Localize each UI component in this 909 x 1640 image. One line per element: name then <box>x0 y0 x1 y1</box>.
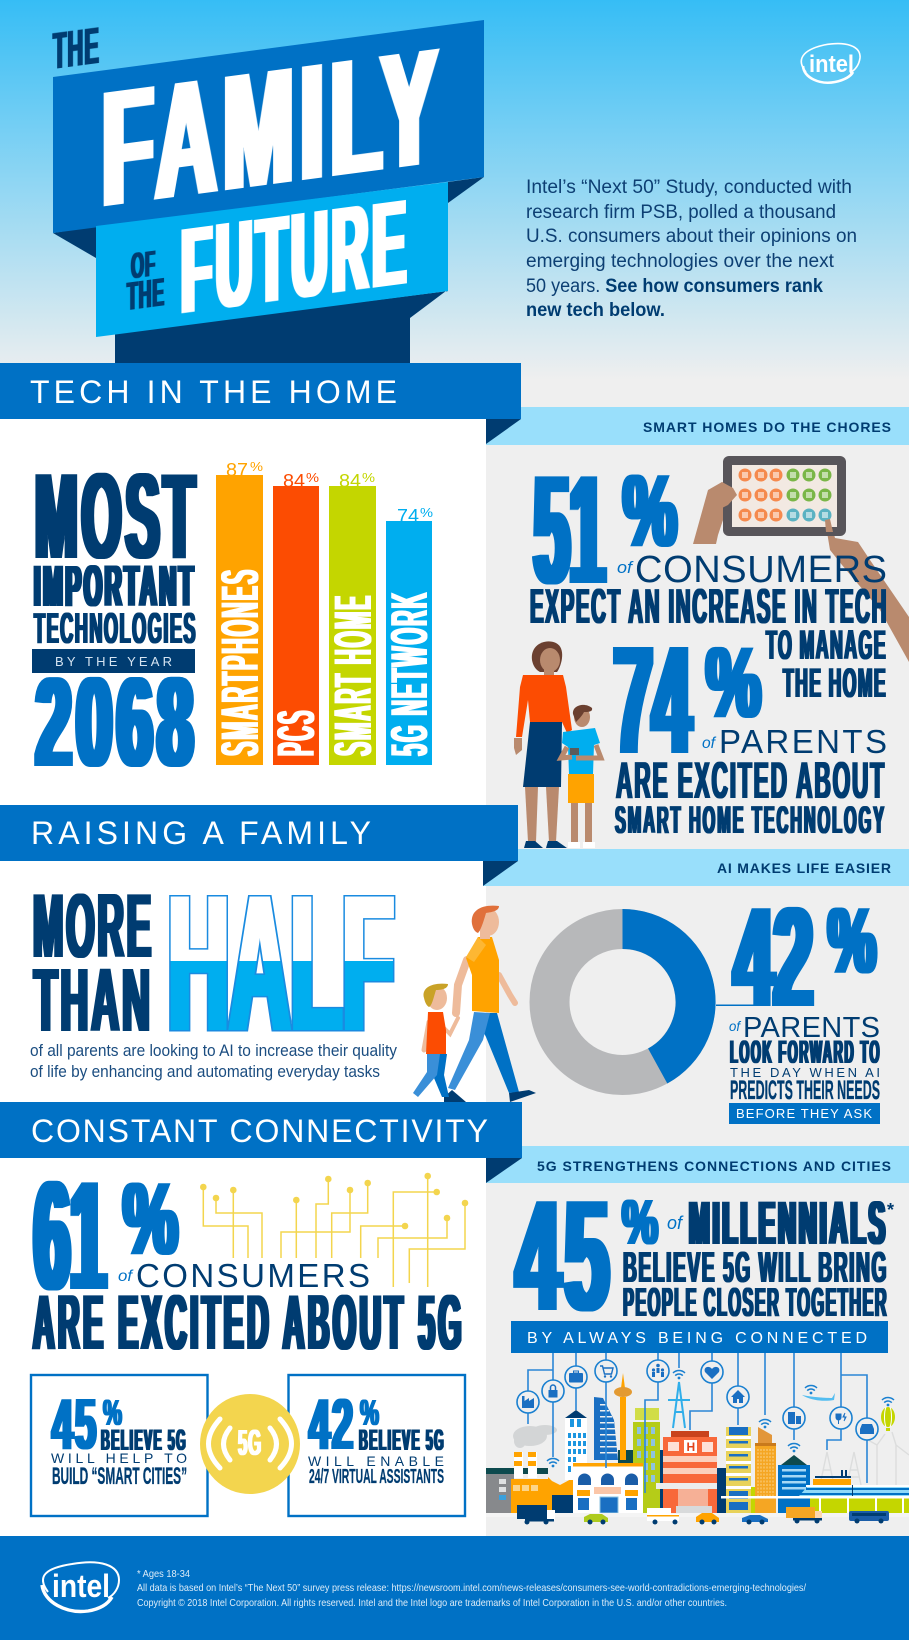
title text <box>53 0 444 356</box>
background panels <box>0 380 909 1540</box>
footer text: All data is based on Intel’s “The Next 50” survey press release: https://newsroom.intel.com/news-releases/consumers-see-world-contradictions-emerging-technologies/ <box>137 1582 806 1594</box>
stat: 42% of parents: THE DAY WHEN AI <box>730 1065 880 1080</box>
light band: ai makes life easier <box>483 849 909 886</box>
connected city illustration <box>486 1353 909 1524</box>
stat: 51% of consumers: of <box>617 558 634 577</box>
icon: people <box>647 1360 669 1382</box>
bar chart: 84 <box>339 471 361 491</box>
text: BELIEVE 5G <box>359 1424 445 1457</box>
bar: by always being connected: BY ALWAYS BEING CONNECTED <box>527 1330 867 1347</box>
stat: 51% of consumers <box>530 443 888 706</box>
bar chart: 87 <box>226 460 248 480</box>
stat: 42% of parents <box>729 878 881 1124</box>
section header: tech in the home: TECH IN THE HOME <box>30 374 397 410</box>
icon: shopping cart <box>595 1360 617 1382</box>
heading: more than half: THAN <box>34 951 153 1051</box>
intro paragraph: Intel’s “Next 50” Study, conducted with <box>526 177 852 198</box>
title text: THE <box>127 269 165 319</box>
section header: tech in the home <box>0 363 521 444</box>
stat: 42% of parents: of <box>729 1018 742 1034</box>
icon: car <box>856 1418 878 1440</box>
intro paragraph: research firm PSB, polled a thousand <box>526 202 836 223</box>
section header: constant connectivity: CONSTANT CONNECTIVITY <box>31 1113 488 1149</box>
bar chart: % <box>362 470 375 485</box>
box: 45% smart cities: BELIEVE 5G <box>101 1424 187 1457</box>
text: MOST <box>35 448 199 584</box>
bar chart: SMART HOME <box>324 594 383 756</box>
title sign: FUTURE <box>181 172 410 339</box>
bar chart: SMARTPHONES <box>211 568 270 756</box>
right buildings <box>721 1427 909 1514</box>
title text: OF <box>131 243 156 287</box>
section header: constant connectivity <box>0 1102 522 1183</box>
stat: 74% of parents <box>614 614 887 842</box>
heading: most important technologies <box>32 448 199 793</box>
stat: 45% of millennials: 45 <box>516 1168 613 1344</box>
intro paragraph: emerging technologies over the next <box>526 251 835 272</box>
light band: smart homes: SMART HOMES DO THE CHORES <box>643 419 891 435</box>
text: parents looking to ai <box>30 1041 397 1081</box>
section header: raising a family <box>0 805 518 886</box>
stat: 42% of parents: 42 <box>734 878 813 1037</box>
box: 42% virtual assistants <box>288 1375 465 1516</box>
icon: 5g signal badge: 5G <box>238 1422 262 1463</box>
stat: 51% of consumers: 51 <box>534 443 605 616</box>
icon: briefcase <box>565 1366 587 1388</box>
icon: lock <box>542 1380 564 1402</box>
stat: 61% of consumers: of <box>118 1268 134 1285</box>
section header: raising a family: RAISING A FAMILY <box>31 815 371 851</box>
intro paragraph: 50 years. See how consumers rank <box>526 276 823 297</box>
background sky <box>0 0 909 380</box>
light band: 5g strengthens: 5G STRENGTHENS CONNECTIONS AND CITIES <box>537 1158 891 1174</box>
heading: more than half: MORE <box>33 876 154 977</box>
box: 45% smart cities: % <box>103 1392 122 1433</box>
bar chart: % <box>306 470 319 485</box>
stat: 61% of consumers: 61 <box>34 1149 106 1322</box>
smoke and background structures <box>513 1425 909 1485</box>
heading: more than half <box>33 855 394 1072</box>
intro paragraph: U.S. consumers about their opinions on <box>526 226 857 247</box>
circuit graphic <box>200 1173 468 1287</box>
stat: 74% of parents: 74 <box>614 614 691 786</box>
icon: heart <box>701 1361 723 1383</box>
stat: 51% of consumers: CONSUMERS <box>635 549 887 591</box>
bar chart: 74 <box>397 506 419 526</box>
text: HALF <box>168 855 394 1072</box>
bar chart: PCS <box>267 709 326 756</box>
vehicles <box>486 1505 909 1524</box>
box: 45% smart cities: WILL HELP TO <box>51 1450 187 1466</box>
stat: 42% of parents: PARENTS <box>743 1012 880 1044</box>
box: 45% smart cities: 45 <box>52 1385 98 1465</box>
box: 42% virtual assistants: WILL ENABLE <box>308 1453 444 1469</box>
text: IMPORTANT <box>34 554 196 619</box>
light band: smart homes <box>486 407 909 445</box>
text: parents looking to ai: of all parents are looking to AI to increase their quality <box>30 1041 397 1060</box>
hospital and tower <box>656 1382 726 1514</box>
wifi signals <box>547 1371 894 1467</box>
box: 45% smart cities: BUILD “SMART CITIES” <box>52 1463 187 1490</box>
illustration: mother and child <box>514 641 601 848</box>
bar chart: % <box>250 459 263 474</box>
bar chart: 84 <box>283 471 305 491</box>
stat: 74% of parents: PARENTS <box>719 723 887 760</box>
text: parents looking to ai: of life by enhancing and automating everyday tasks <box>30 1062 380 1081</box>
plane and balloon <box>802 1393 895 1431</box>
icon: house <box>727 1386 749 1408</box>
stat: 45% of millennials: % <box>622 1186 658 1258</box>
stat: 74% of parents: % <box>706 627 761 739</box>
stat: 61% of consumers <box>33 1149 465 1366</box>
intel logo top right <box>801 44 860 83</box>
box: 45% smart cities <box>31 1375 208 1516</box>
stat: 74% of parents: of <box>702 735 717 752</box>
intel logo top right: intel <box>809 51 854 78</box>
left buildings <box>486 1373 664 1513</box>
footer text: Copyright © 2018 Intel Corporation. All rights reserved. Intel and the Intel logo are trademarks of Intel Corporation in the U.S. and/or other countries. <box>137 1597 727 1609</box>
text: TECHNOLOGIES <box>34 605 197 653</box>
icon: buildings <box>783 1407 805 1429</box>
illustration: hands with tablet <box>693 456 909 662</box>
icon: plug <box>830 1407 852 1429</box>
stat: 45% of millennials: of <box>667 1213 684 1233</box>
footer text: * Ages 18-34 <box>137 1568 190 1580</box>
bar chart: % <box>420 505 433 520</box>
bar chart: 5G NETWORK <box>381 591 439 756</box>
footer <box>0 1536 909 1640</box>
light band: 5g strengthens <box>486 1146 909 1183</box>
bar: by always being connected <box>511 1321 888 1353</box>
illustration: parent and child walking <box>413 906 536 1102</box>
icon: factory <box>517 1391 539 1413</box>
box: 42% virtual assistants: 42 <box>309 1385 355 1465</box>
box: 42% virtual assistants: % <box>360 1392 379 1433</box>
stat: 42% of parents: BEFORE THEY ASK <box>736 1106 872 1121</box>
heading: most important technologies: 2068 <box>36 651 198 793</box>
stat: 45% of millennials <box>516 1168 894 1344</box>
stat: 45% of millennials: * <box>887 1200 894 1220</box>
stat: 61% of consumers: % <box>123 1161 178 1276</box>
hospital and tower: H <box>686 1440 695 1454</box>
connector lines <box>528 1353 867 1493</box>
stat: 51% of consumers: % <box>623 453 677 568</box>
icon: 5g signal badge <box>200 1394 300 1494</box>
title text: THE <box>53 17 100 81</box>
intro paragraph <box>526 177 857 321</box>
footer intel logo: intel <box>52 1568 110 1604</box>
box: 42% virtual assistants: 24/7 VIRTUAL ASSISTANTS <box>309 1465 444 1488</box>
heading: most important technologies: BY THE YEAR <box>55 654 172 669</box>
intro paragraph: new tech below. <box>526 300 665 321</box>
footer intel logo <box>42 1562 119 1611</box>
title sign <box>53 0 484 363</box>
donut chart <box>550 929 768 1075</box>
bar chart <box>211 459 439 765</box>
stat: 61% of consumers: CONSUMERS <box>136 1257 370 1294</box>
connected service icons <box>517 1360 878 1440</box>
light band: ai makes life easier: AI MAKES LIFE EASIER <box>717 860 891 876</box>
footer text <box>137 1568 806 1609</box>
